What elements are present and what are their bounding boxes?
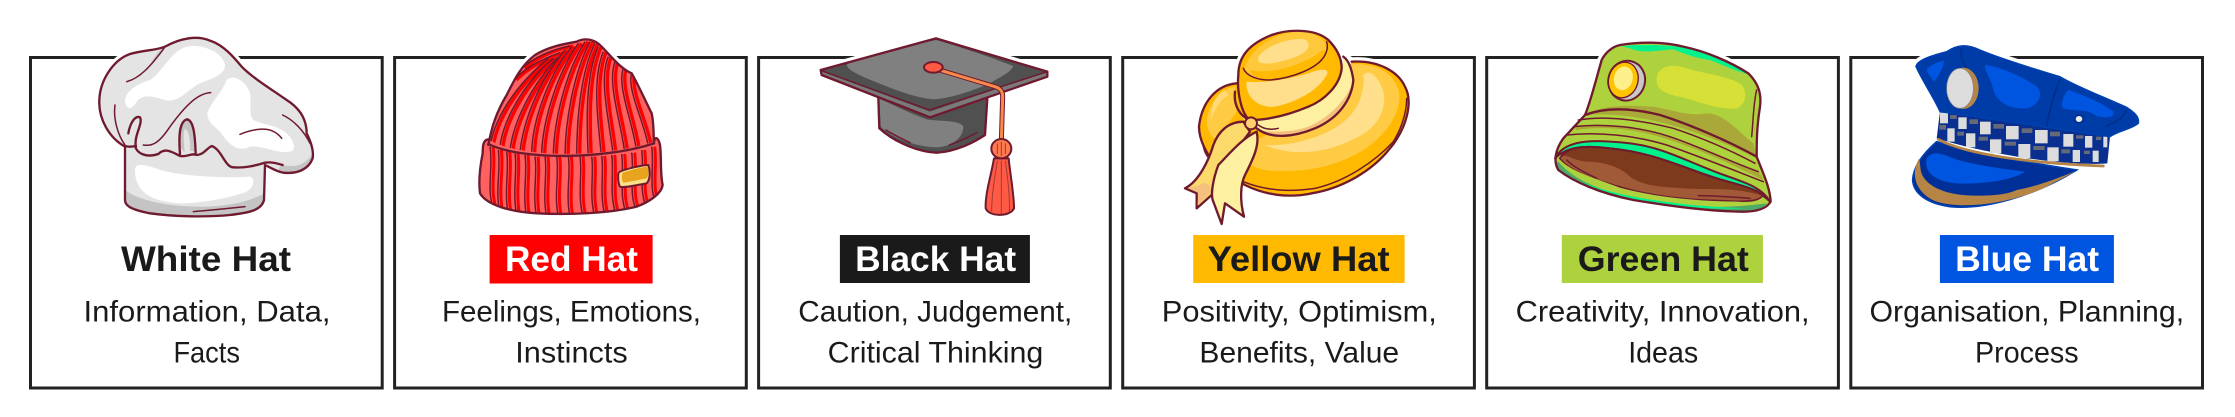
heading: White Hat: White Hat bbox=[121, 240, 291, 279]
heading chip: Green Hat bbox=[1562, 235, 1763, 283]
heading chip: Yellow Hat bbox=[1193, 235, 1405, 283]
panel border bbox=[759, 58, 1110, 388]
panel border bbox=[395, 58, 746, 388]
description: white hat bbox=[84, 296, 330, 370]
heading: Blue Hat: Blue Hat bbox=[1955, 240, 2099, 279]
description: black hat bbox=[798, 296, 1072, 370]
description: yellow hat: Benefits, Value bbox=[1199, 336, 1399, 370]
description: yellow hat: Positivity, Optimism, bbox=[1162, 296, 1437, 328]
heading chip: Blue Hat bbox=[1940, 235, 2114, 283]
icon: green bucket hat bbox=[1555, 43, 1771, 212]
description: red hat: Feelings, Emotions, bbox=[442, 296, 701, 328]
description: blue hat: Organisation, Planning, bbox=[1870, 296, 2184, 328]
description: green hat bbox=[1516, 296, 1810, 370]
heading: Green Hat: Green Hat bbox=[1578, 240, 1749, 279]
description: white hat: Facts bbox=[173, 336, 240, 370]
description: black hat: Caution, Judgement, bbox=[798, 296, 1072, 328]
icon: blue police cap bbox=[1913, 46, 2139, 207]
description: blue hat: Process bbox=[1975, 336, 2079, 370]
panel: blue hat bbox=[1851, 46, 2202, 388]
icon: graduation cap bbox=[821, 38, 1047, 215]
panel: yellow hat bbox=[1123, 31, 1474, 388]
panel border bbox=[1123, 58, 1474, 388]
heading chip: Black Hat bbox=[840, 235, 1030, 283]
panel: green hat bbox=[1487, 43, 1838, 388]
description: red hat bbox=[442, 296, 701, 370]
description: white hat: Information, Data, bbox=[84, 296, 330, 328]
panel border bbox=[1487, 58, 1838, 388]
description: black hat: Critical Thinking bbox=[828, 336, 1043, 370]
description: yellow hat bbox=[1162, 296, 1437, 370]
heading: Yellow Hat: Yellow Hat bbox=[1208, 240, 1390, 279]
icon: red beanie bbox=[479, 39, 663, 215]
description: red hat: Instincts bbox=[515, 336, 628, 370]
panel: white hat bbox=[30, 38, 382, 388]
description: green hat: Creativity, Innovation, bbox=[1516, 296, 1810, 328]
panel: black hat bbox=[759, 38, 1110, 388]
description: green hat: Ideas bbox=[1628, 336, 1698, 370]
panel: red hat bbox=[395, 39, 746, 388]
heading chip: Red Hat bbox=[490, 235, 653, 284]
icon: yellow sun hat bbox=[1185, 31, 1409, 224]
icon: white chef hat bbox=[99, 38, 313, 216]
description: blue hat bbox=[1870, 296, 2184, 370]
heading: Black Hat: Black Hat bbox=[855, 240, 1016, 279]
panel border bbox=[1851, 58, 2202, 388]
heading: Red Hat: Red Hat bbox=[505, 240, 638, 279]
panel border bbox=[30, 58, 382, 388]
